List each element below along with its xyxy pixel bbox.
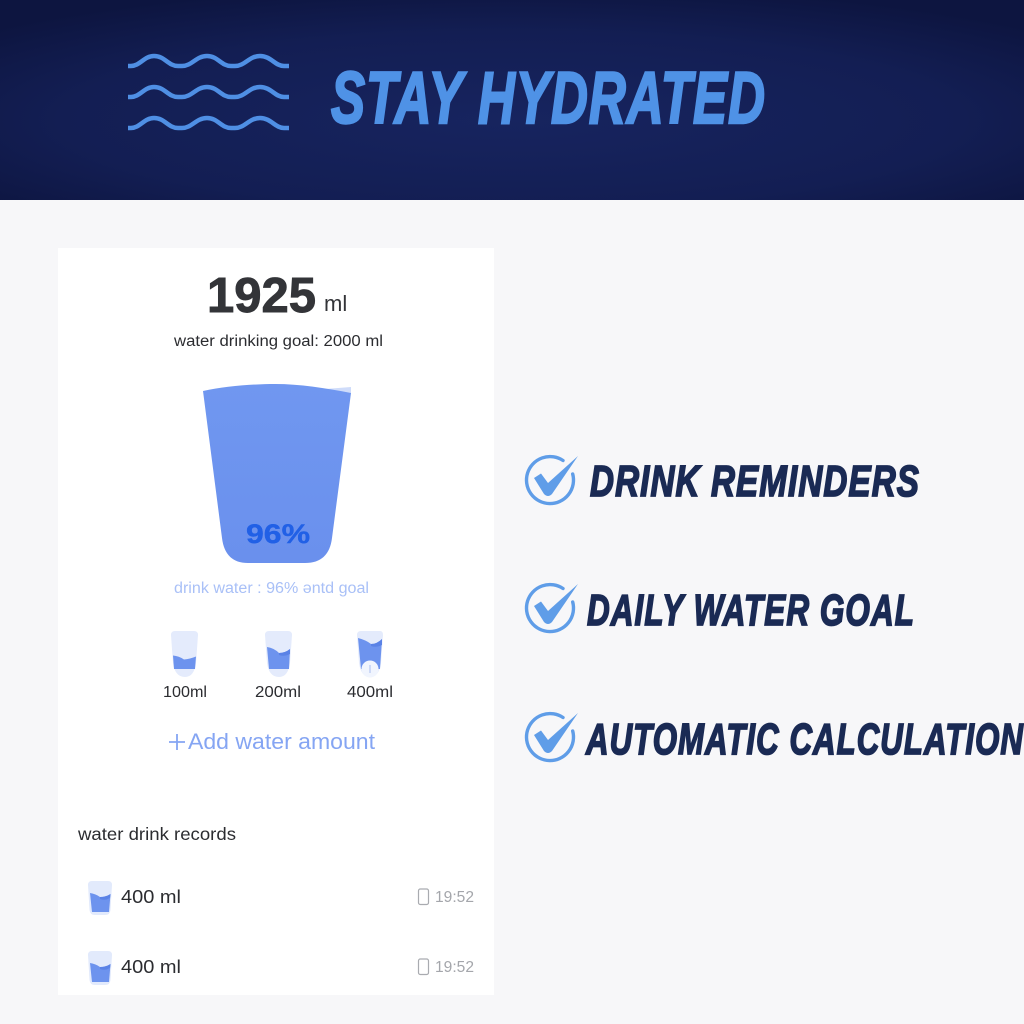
quick add options xyxy=(163,631,393,701)
records heading: water drink records xyxy=(77,824,236,844)
record row 2 xyxy=(88,951,474,985)
record row 1: 400 ml xyxy=(121,886,181,907)
total intake: ml xyxy=(324,291,347,316)
progress caption: drink water : 96% əntd goal xyxy=(174,580,369,597)
chart: large water glass at 96%: 96% xyxy=(246,519,310,549)
title: STAY HYDRATED xyxy=(331,58,766,139)
feature: drink reminders xyxy=(526,456,920,506)
panel: water tracker app xyxy=(58,248,494,995)
record row 2: 19:52 xyxy=(435,959,474,976)
goal text: water drinking goal: 2000 ml xyxy=(173,333,383,350)
total intake: 1925 xyxy=(207,269,316,323)
chart: large water glass at 96% xyxy=(203,384,351,563)
icon: 400ml glass xyxy=(357,631,383,678)
header banner xyxy=(0,0,1024,200)
label: 200ml: 200ml xyxy=(255,684,301,701)
record row 1: 19:52 xyxy=(435,889,474,906)
icon: water waves xyxy=(128,56,289,128)
label: 100ml: 100ml xyxy=(163,684,207,701)
label: 400ml: 400ml xyxy=(347,684,393,701)
feature: daily water goal xyxy=(526,584,915,635)
record row 1 xyxy=(88,881,474,915)
feature: drink reminders: DRINK REMINDERS xyxy=(590,457,920,506)
record row 2: 400 ml xyxy=(121,956,181,977)
icon: 100ml glass xyxy=(171,631,198,677)
add water button: Add water amount xyxy=(188,729,375,754)
icon: 200ml glass xyxy=(265,631,292,677)
